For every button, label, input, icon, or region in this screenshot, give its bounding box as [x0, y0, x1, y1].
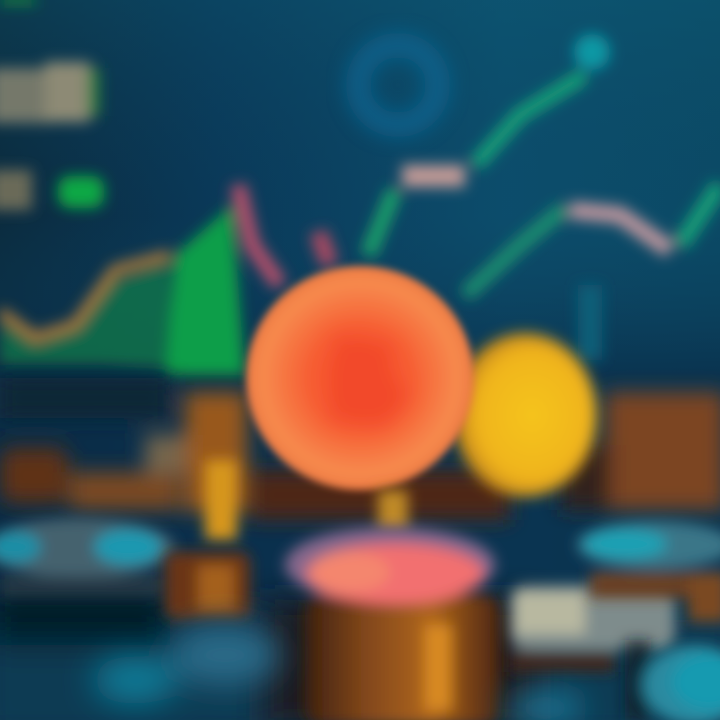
- coin: yellow: [453, 333, 597, 497]
- chart: right rising line: [465, 185, 720, 360]
- chart: left green and orange line: [0, 185, 330, 375]
- dark foreground base: [0, 590, 720, 720]
- chart: centre rising line: [368, 34, 610, 255]
- coin: teal bottom right: [625, 640, 720, 720]
- coin stack: small copper: [165, 552, 250, 620]
- golden pillars: [205, 460, 408, 540]
- coin stacks: back row: [0, 378, 720, 520]
- coins: flat teal left: [0, 518, 175, 596]
- coin: orange bitcoin: [246, 266, 474, 490]
- coin stack: pink top centre: [285, 527, 500, 720]
- heading: blurred text block: [0, 0, 104, 210]
- coin: teal bottom left: [93, 625, 585, 720]
- coins: pale right: [510, 585, 675, 672]
- faint circle icon top centre: [358, 45, 438, 125]
- coins: teal right: [577, 521, 720, 622]
